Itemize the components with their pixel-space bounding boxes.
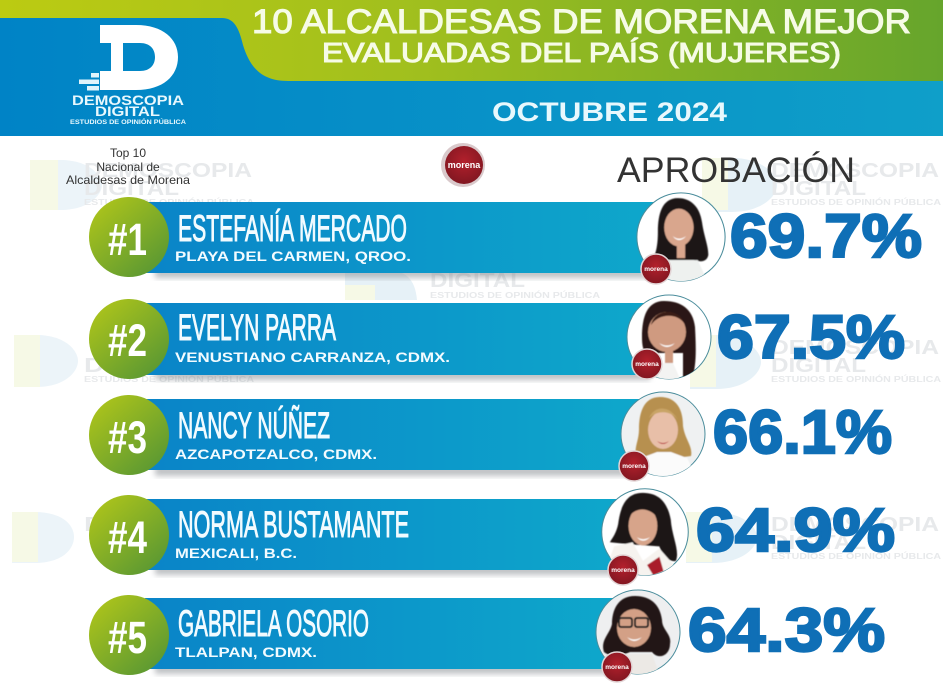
caption: top 10: Top 10 <box>110 146 146 160</box>
watermark: middle right: ESTUDIOS DE OPINIÓN PÚBLICA <box>771 375 941 384</box>
watermark: top left: DEMOSCOPIA <box>84 160 252 182</box>
watermark: middle left: ESTUDIOS DE OPINIÓN PÚBLICA <box>84 375 254 384</box>
logo: Demoscopia Digital: DIGITAL <box>95 103 161 119</box>
percentage 4: 64.9% <box>696 496 895 564</box>
party badge 2: morena <box>635 361 659 368</box>
logo: Morena <box>441 143 485 187</box>
row 2 <box>89 295 905 381</box>
watermark: lower right: DIGITAL <box>771 532 866 554</box>
portrait 3 <box>621 392 705 478</box>
row 5: TLALPAN, CDMX. <box>175 645 317 660</box>
watermark: top left: ESTUDIOS DE OPINIÓN PÚBLICA <box>84 198 254 207</box>
header band <box>0 0 943 136</box>
row 5 <box>89 590 885 682</box>
party badge 3: morena <box>622 463 646 470</box>
row 1: ESTEFANÍA MERCADO <box>178 208 407 249</box>
row 1 <box>89 193 922 284</box>
row 3: #3 <box>108 412 147 463</box>
watermark: top left <box>30 160 254 210</box>
party badge 5: morena <box>605 664 629 671</box>
watermark: lower right <box>686 512 941 563</box>
row 3: AZCAPOTZALCO, CDMX. <box>175 447 377 462</box>
portrait 4 <box>602 489 688 577</box>
row 4: #4 <box>108 512 147 563</box>
caption: top 10: Alcaldesas de Morena <box>66 173 190 187</box>
party badge 4 <box>608 555 638 585</box>
watermark: centre <box>345 270 600 300</box>
watermark: middle right: DEMOSCOPIA <box>771 337 939 359</box>
watermark: centre: ESTUDIOS DE OPINIÓN PÚBLICA <box>430 291 600 300</box>
row 1: #1 <box>108 214 147 265</box>
watermark: top left: DIGITAL <box>84 178 179 200</box>
portrait 1 <box>637 193 725 283</box>
watermark: middle left <box>14 335 254 387</box>
percentage 1: 69.7% <box>730 202 922 270</box>
row 5: GABRIELA OSORIO <box>178 603 369 644</box>
row 4 <box>89 489 895 585</box>
row 3: NANCY NÚÑEZ <box>178 405 330 446</box>
logo: Demoscopia Digital <box>70 25 187 126</box>
title: 10 ALCALDESAS DE MORENA MEJOR <box>252 3 911 41</box>
row 1: PLAYA DEL CARMEN, QROO. <box>175 249 411 264</box>
party badge 4: morena <box>611 567 635 574</box>
party badge 1: morena <box>644 266 668 273</box>
watermark: middle left: DIG <box>84 355 134 377</box>
row 4: NORMA BUSTAMANTE <box>178 504 409 545</box>
caption: top 10 <box>66 146 190 187</box>
watermark: lower left: DE <box>84 514 124 536</box>
watermark: middle right: DIGITAL <box>771 355 866 377</box>
watermark: centre: DIGITAL <box>430 270 525 292</box>
watermark: top right: ESTUDIOS DE OPINIÓN PÚBLICA <box>771 198 941 207</box>
percentage 2: 67.5% <box>717 303 905 371</box>
logo: Demoscopia Digital: DEMOSCOPIA <box>72 92 184 108</box>
party badge 3 <box>619 451 649 481</box>
watermark: top right: DIGITAL <box>771 178 866 200</box>
logo: Morena: morena <box>448 160 481 170</box>
watermark: middle right <box>690 335 941 389</box>
watermark: lower right: ESTUDIOS DE OPINIÓN PÚBLICA <box>771 552 941 561</box>
title <box>252 3 911 68</box>
row 3 <box>89 392 892 481</box>
watermark: top right: DEMOSCOPIA <box>771 160 939 182</box>
caption: top 10: Nacional de <box>96 160 160 174</box>
row 4: MEXICALI, B.C. <box>175 546 297 561</box>
portrait 2 <box>627 295 711 381</box>
heading: approval: APROBACIÓN <box>617 151 855 190</box>
row 2: #2 <box>108 315 147 366</box>
row 2: VENUSTIANO CARRANZA, CDMX. <box>175 350 450 365</box>
watermark: lower left <box>12 512 124 563</box>
row 2: EVELYN PARRA <box>178 307 336 348</box>
party badge 1 <box>641 254 671 284</box>
logo: Demoscopia Digital: ESTUDIOS DE OPINIÓN PÚBLICA <box>70 118 187 126</box>
portrait 5 <box>596 590 680 676</box>
percentage 5: 64.3% <box>688 596 885 664</box>
row 5: #5 <box>108 612 147 663</box>
party badge 5 <box>602 652 632 682</box>
title: EVALUADAS DEL PAÍS (MUJERES) <box>322 37 841 68</box>
percentage 3: 66.1% <box>713 398 892 466</box>
watermark: top right <box>702 158 941 212</box>
watermark: lower right: DEMOSCOPIA <box>771 514 939 536</box>
party badge 2 <box>632 349 662 379</box>
date: OCTUBRE 2024 <box>492 97 727 127</box>
